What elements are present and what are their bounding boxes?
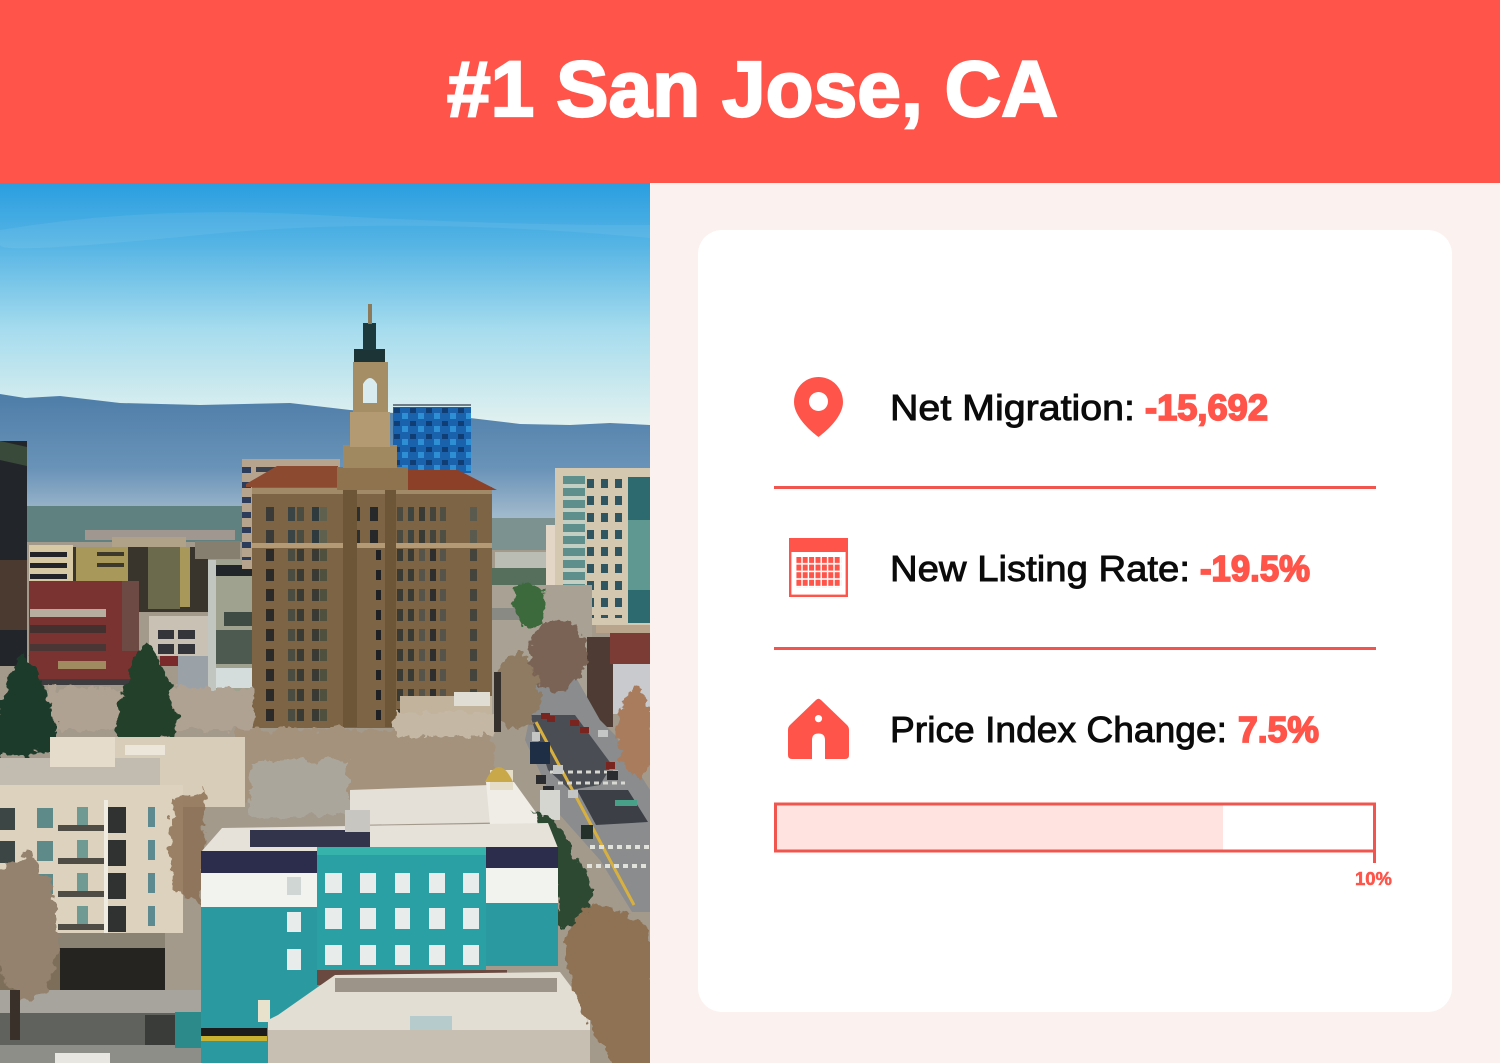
photo: downtown San Jose skyline <box>0 183 655 1063</box>
evergreen trees <box>0 642 176 757</box>
sidewalk and road <box>0 990 201 1063</box>
distant tree line <box>0 506 556 588</box>
value: net migration: -15,692 <box>1145 387 1268 428</box>
street <box>525 667 650 912</box>
back tan tower <box>242 459 340 569</box>
icon: location pin <box>794 377 843 437</box>
bare street trees <box>496 619 654 776</box>
mid-left buildings <box>29 537 240 690</box>
green hedge <box>530 812 592 925</box>
label: net migration: Net Migration: <box>890 387 1135 428</box>
label: new listing rate: New Listing Rate: <box>890 548 1190 589</box>
blue glass tower <box>393 404 471 473</box>
row: price index change <box>788 699 1319 759</box>
icon: calendar <box>789 538 848 596</box>
main historic building <box>246 304 497 728</box>
bare tree left <box>0 850 59 1040</box>
left dark tower <box>0 441 27 666</box>
icon: house <box>788 699 849 759</box>
foreground rooftop <box>268 972 590 1063</box>
bare trees bottom right <box>565 905 655 1063</box>
right office tower <box>546 468 650 625</box>
title: #1 San Jose, CA <box>447 44 1058 133</box>
beige apartment building <box>0 737 245 993</box>
label: price index change: Price Index Change: <box>890 709 1227 750</box>
value: price index change: 7.5% <box>1238 709 1319 750</box>
teal building <box>201 810 558 1063</box>
mirrored glass building <box>208 560 252 692</box>
mountains <box>0 394 650 530</box>
bare trees between buildings <box>170 790 205 905</box>
row: net migration <box>794 377 1268 437</box>
right mid-ground streetscape <box>492 581 650 727</box>
bare trees mid-ground <box>48 688 495 815</box>
value: new listing rate: -19.5% <box>1200 548 1310 589</box>
row: new listing rate <box>789 538 1310 596</box>
white rooftops and dome <box>350 767 545 825</box>
chimney <box>494 672 501 732</box>
scale label: 10%: 10% <box>1355 869 1392 889</box>
progress bar: 7.5% of 10% <box>776 804 1392 889</box>
header banner <box>0 0 1500 183</box>
panel: stats card <box>698 230 1452 1012</box>
